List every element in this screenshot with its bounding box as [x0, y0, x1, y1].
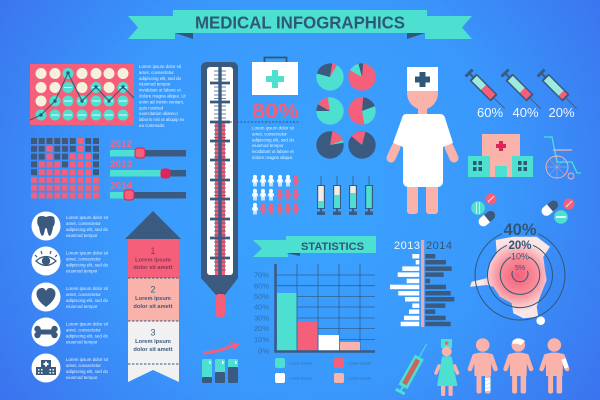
icon: eye [32, 246, 60, 276]
thermometer [201, 62, 238, 317]
text block: intro: invidulant ut labore et [139, 88, 182, 93]
patient with head bandage [506, 338, 531, 394]
bar chart: 70% [254, 271, 269, 280]
icon: bone [32, 318, 60, 346]
butterfly bar chart 2013/2014: 2013 [394, 240, 420, 252]
text block: icon captions: Lorem ipsum dolor sit [66, 357, 109, 362]
arrow with three steps: 2 [150, 284, 156, 294]
title: MEDICAL INFOGRAPHICS [195, 12, 405, 32]
legend [275, 358, 372, 383]
arrow with three steps: dolor sit amett [133, 304, 173, 310]
syringe 40% [500, 68, 544, 112]
text block: icon captions: adipiscing elit, sed do [66, 298, 109, 303]
bar chart: 40% [254, 303, 269, 312]
syringe 20% [536, 68, 580, 112]
text block: kit: dolore magna aliqua. [252, 155, 293, 160]
arrow with three steps: Lorem ipsum [135, 258, 171, 264]
heat map with concentric rings: 5% [515, 265, 525, 272]
bar chart: 60% [254, 281, 269, 290]
legend: Lorem ipsum [289, 360, 313, 366]
arrow with three steps: 3 [150, 328, 156, 338]
heat map with concentric rings: 10% [511, 252, 529, 262]
hospital building [468, 134, 533, 177]
text block: intro: eiusmod tempor [139, 82, 171, 87]
slider chart by year: 2014 [110, 180, 132, 190]
slider chart by year [110, 139, 186, 200]
patient with leg bandage [470, 338, 496, 394]
trend arrow [203, 342, 240, 353]
text block: intro: quis nostrud [139, 105, 163, 110]
text block: intro: amet, consectetur [139, 70, 174, 75]
panel: pill calendar with line chart [30, 64, 134, 125]
nurse figure [391, 67, 454, 214]
text block: intro: Lorem ipsum dolor sit [139, 64, 182, 69]
text block: kit [252, 126, 295, 160]
battery bars [202, 359, 238, 383]
heat map with concentric rings: 20% [508, 240, 532, 252]
text block: kit: Lorem ipsum dolor sit [252, 126, 295, 130]
pills left [471, 194, 497, 228]
text block: icon captions: Lorem ipsum dolor sit [66, 322, 109, 326]
first aid kit [252, 58, 298, 95]
text block: icon captions: Lorem ipsum dolor sit [66, 250, 109, 256]
text block: intro: adipiscing elit, sed do [139, 76, 182, 81]
text block: icon captions: Lorem ipsum dolor sit [66, 286, 109, 291]
text block: intro: ea commodo [139, 123, 165, 128]
text block: icon captions: adipiscing elit, sed do [66, 227, 109, 232]
bar chart: 30% [254, 314, 269, 323]
stat: 80%: 80% [252, 100, 299, 123]
text block: icon captions [66, 215, 109, 380]
heat map with concentric rings [470, 221, 565, 325]
legend: Lorem ipsum [289, 376, 313, 380]
text block: icon captions: eiusmod tempor [66, 375, 98, 380]
waffle grid chart [31, 138, 99, 199]
arrow with three steps: dolor sit amett [133, 265, 173, 271]
icon: heart [32, 282, 60, 312]
arrow with three steps [125, 211, 181, 382]
bar chart: 10% [254, 335, 269, 344]
wheelchair [544, 137, 581, 179]
text block: icon captions: eiusmod tempor [66, 304, 98, 309]
text block: kit: amet, consectetur [252, 131, 287, 136]
text block: intro: exercitation ullamco [139, 111, 178, 116]
pie charts [316, 63, 376, 159]
dashed pointer line [230, 121, 300, 123]
syringes with percentages: 20% [548, 105, 575, 120]
slider chart by year: 2013 [110, 159, 132, 169]
syringes with percentages: 60% [477, 105, 503, 120]
text block: icon captions: amet, consectetur [66, 292, 101, 297]
text block: intro: dolore magna aliqua. Ut [139, 94, 186, 98]
arrow with three steps: Lorem ipsum [135, 296, 171, 302]
arrow with three steps: Lorem ipsum [135, 339, 171, 345]
heading: statistics: STATISTICS [301, 241, 364, 253]
patient with arm bandage [542, 338, 567, 394]
icon list [32, 212, 109, 382]
text block: icon captions: adipiscing elit, sed do [66, 262, 109, 268]
text block: kit: eiusmod tempor [252, 143, 284, 148]
text block: kit: adipiscing elit, sed do [252, 137, 295, 142]
text block: icon captions: adipiscing elit, sed do [66, 334, 109, 338]
butterfly bar chart 2013/2014 [390, 240, 454, 327]
bar chart [254, 264, 375, 383]
icon: hospital [32, 354, 60, 382]
large diagonal syringe [395, 341, 431, 395]
text block: icon captions: amet, consectetur [66, 256, 101, 262]
arrow with three steps: 1 [150, 246, 156, 256]
people pictogram [252, 175, 299, 214]
bar chart: 50% [254, 292, 269, 301]
text block: kit: incididunt ut labore et [252, 149, 295, 154]
vertical syringes [317, 176, 373, 215]
bar chart: 20% [254, 324, 269, 333]
text block: icon captions: amet, consectetur [66, 328, 101, 332]
pills right [540, 198, 574, 224]
title ribbon [128, 10, 472, 39]
legend: Lorem ipsum [348, 376, 372, 380]
text block: icon captions: eiusmod tempor [66, 233, 98, 238]
arrow with three steps: dolor sit amett [133, 347, 173, 353]
syringes with percentages [464, 68, 580, 120]
icon: tooth [32, 212, 60, 240]
syringes with percentages: 40% [512, 105, 539, 120]
statistics ribbon [253, 236, 376, 257]
syringe 60% [464, 68, 508, 112]
butterfly bar chart 2013/2014: 2014 [426, 240, 452, 252]
text block: intro [139, 64, 186, 128]
text block: icon captions: Lorem ipsum dolor sit [66, 215, 109, 220]
text block: icon captions: amet, consectetur [66, 363, 101, 368]
text block: icon captions: eiusmod tempor [66, 268, 98, 274]
text block: icon captions: eiusmod tempor [66, 340, 98, 344]
text block: icon captions: adipiscing elit, sed do [66, 369, 109, 374]
text block: intro: laboris nisi ut aliquip ex [139, 117, 185, 122]
legend: Lorem ipsum [348, 360, 372, 366]
nurse patient figure [436, 339, 458, 396]
slider chart by year: 2012 [110, 139, 132, 149]
bar chart: 0% [258, 346, 269, 356]
heat map with concentric rings: 40% [503, 221, 537, 239]
text block: intro: enim ad minim veniam, [139, 99, 184, 104]
text block: icon captions: amet, consectetur [66, 221, 101, 226]
